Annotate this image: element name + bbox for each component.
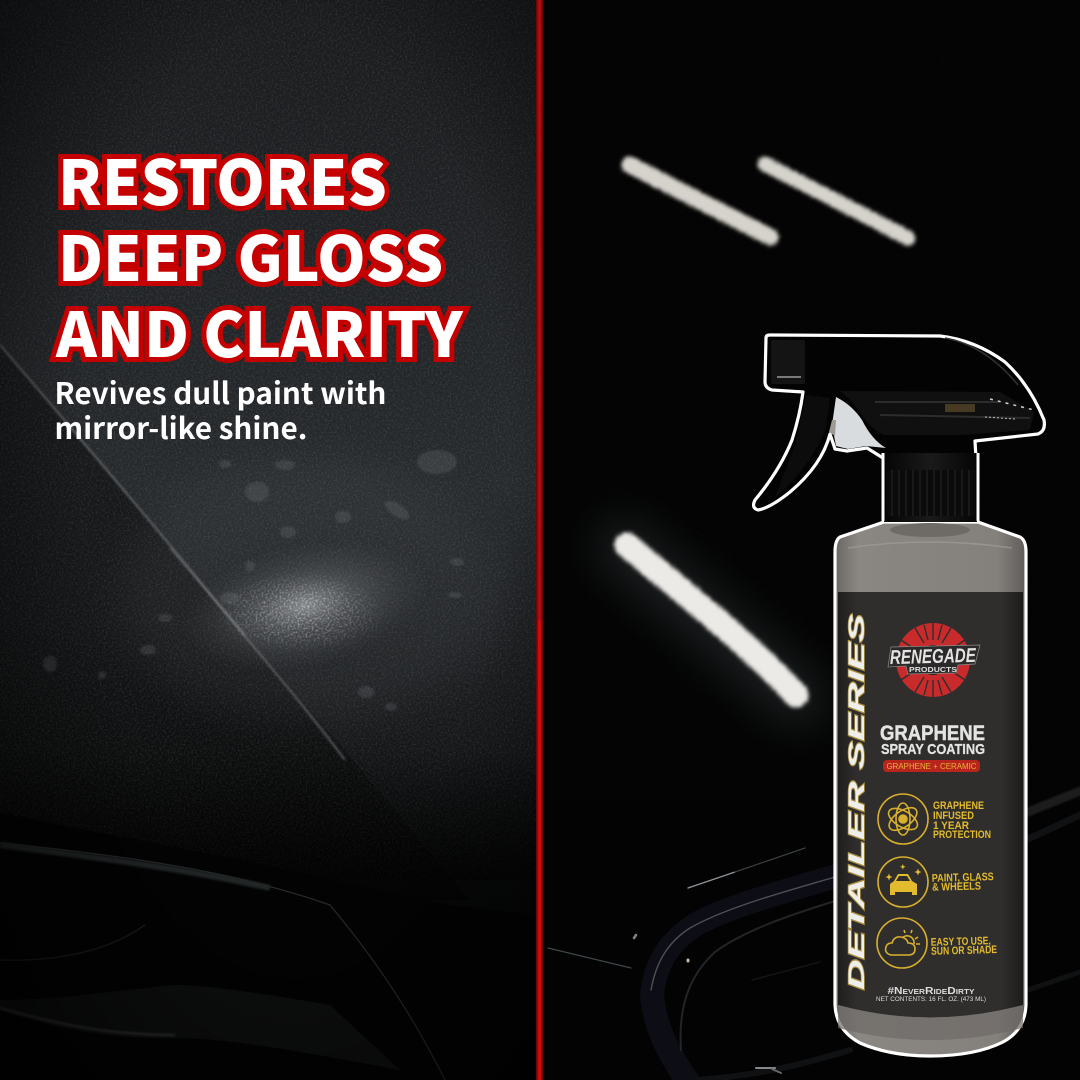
text: graphene infused: INFUSED <box>933 810 974 822</box>
panel: glossy paint photo (right) <box>541 0 1080 1080</box>
subheading <box>54 370 386 448</box>
heading: DEEP GLOSS <box>58 209 443 299</box>
water spots <box>43 450 464 711</box>
text: paint glass wheels <box>932 871 994 894</box>
reflection streaks <box>627 164 908 695</box>
heading: RESTORES <box>58 133 387 223</box>
text: paint glass wheels: PAINT, GLASS <box>932 871 994 885</box>
car body reflections <box>548 791 1080 1080</box>
text: graphene infused <box>933 800 991 841</box>
label: product name: GRAPHENE <box>880 722 985 745</box>
heading: AND CLARITY <box>55 285 464 375</box>
text: hashtag and net contents: #NeverRideDirty <box>888 986 975 997</box>
reflection streak glow <box>622 545 800 700</box>
trigger sprayer head <box>754 335 1044 510</box>
heading <box>55 133 464 375</box>
label: product name <box>880 722 985 758</box>
bottle label <box>838 592 1023 1018</box>
text: graphene infused: 1 YEAR <box>933 820 969 832</box>
icon: car <box>878 857 928 907</box>
text: hashtag and net contents <box>876 986 986 1003</box>
label: red pill: GRAPHENE + CERAMIC <box>886 761 976 771</box>
subheading: Revives dull paint with <box>54 370 386 413</box>
product: spray bottle <box>754 335 1044 1056</box>
car headlight area <box>2 816 301 874</box>
text: easy to use <box>931 935 997 958</box>
crease line <box>0 345 345 760</box>
label: Detailer Series vertical title: DETAILER SERIES <box>844 613 869 990</box>
label: Renegade logo: RENEGADE <box>890 645 977 669</box>
text: graphene infused: PROTECTION <box>933 829 991 841</box>
subheading: mirror-like shine. <box>54 405 307 448</box>
screw cap <box>883 453 978 522</box>
center divider <box>536 0 543 1080</box>
icon: sun and cloud <box>877 918 927 968</box>
text: easy to use: SUN OR SHADE <box>931 944 997 958</box>
bottle body <box>835 522 1026 1056</box>
text: easy to use: EASY TO USE, <box>931 935 991 949</box>
text: paint glass wheels: & WHEELS <box>932 880 981 894</box>
label: Renegade logo: PRODUCTS <box>909 665 957 674</box>
panel: dull paint photo (left) <box>0 0 537 1080</box>
label: Renegade logo <box>888 623 980 697</box>
icon: atom <box>878 794 928 844</box>
text: hashtag and net contents: NET CONTENTS: 16 FL. OZ. (473 ML) <box>876 996 986 1003</box>
label: product name: SPRAY COATING <box>881 741 985 758</box>
text: graphene infused: GRAPHENE <box>933 800 984 812</box>
